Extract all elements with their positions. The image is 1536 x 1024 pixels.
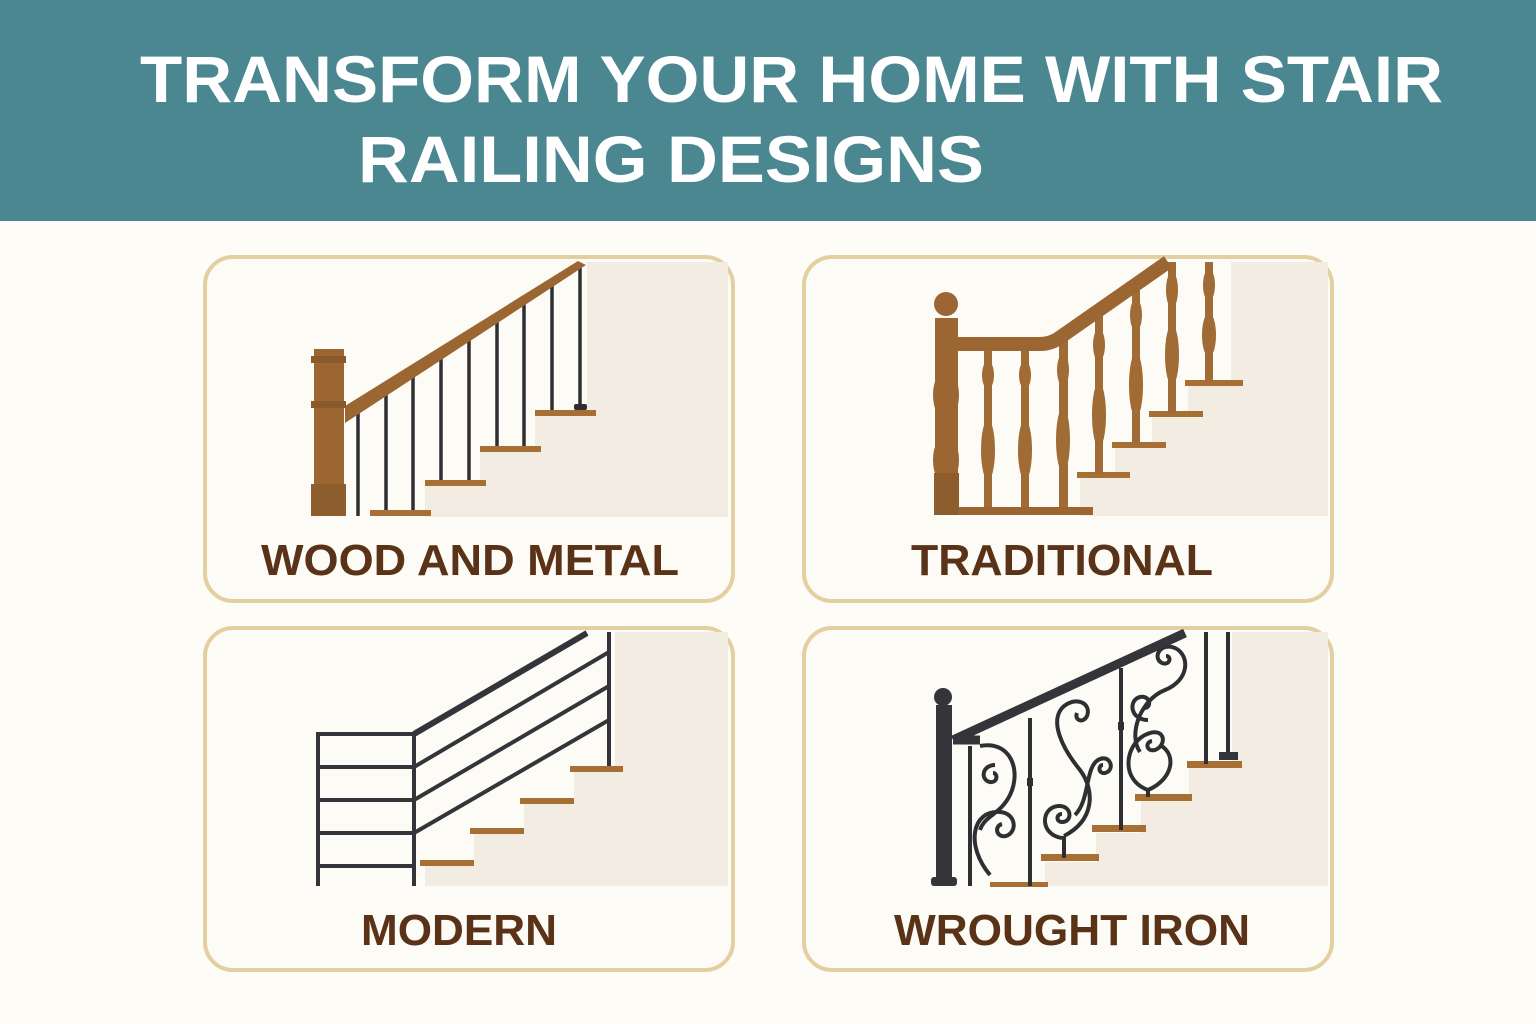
newel post [931, 688, 957, 886]
wall and steps [1045, 632, 1328, 886]
wall and steps [425, 632, 728, 886]
knots [1027, 722, 1124, 786]
turned balusters [981, 262, 1216, 510]
label: WROUGHT IRON [894, 906, 1250, 955]
header banner [0, 0, 1536, 221]
panel: wood and metal [205, 257, 733, 601]
metal balusters [358, 265, 580, 516]
wall and steps [425, 262, 728, 517]
handrail [345, 261, 586, 423]
title: RAILING DESIGNS [358, 122, 984, 196]
panel: modern [205, 628, 733, 970]
metal frame [316, 632, 609, 886]
treads [370, 410, 596, 516]
panel: wrought iron [804, 628, 1332, 970]
curved handrail [958, 262, 1168, 344]
title: TRANSFORM YOUR HOME WITH STAIR [140, 42, 1443, 116]
handrail [953, 633, 1185, 740]
treads [1077, 380, 1243, 478]
label: TRADITIONAL [911, 536, 1213, 585]
newel post [933, 292, 959, 515]
panel: traditional [804, 257, 1332, 601]
label: MODERN [361, 906, 557, 955]
bottom rail [935, 507, 1093, 515]
scrollwork [970, 632, 1228, 886]
newel post [311, 349, 346, 516]
wall and steps [1080, 262, 1328, 516]
treads [420, 766, 623, 866]
label: WOOD AND METAL [261, 536, 679, 585]
treads [990, 761, 1242, 887]
